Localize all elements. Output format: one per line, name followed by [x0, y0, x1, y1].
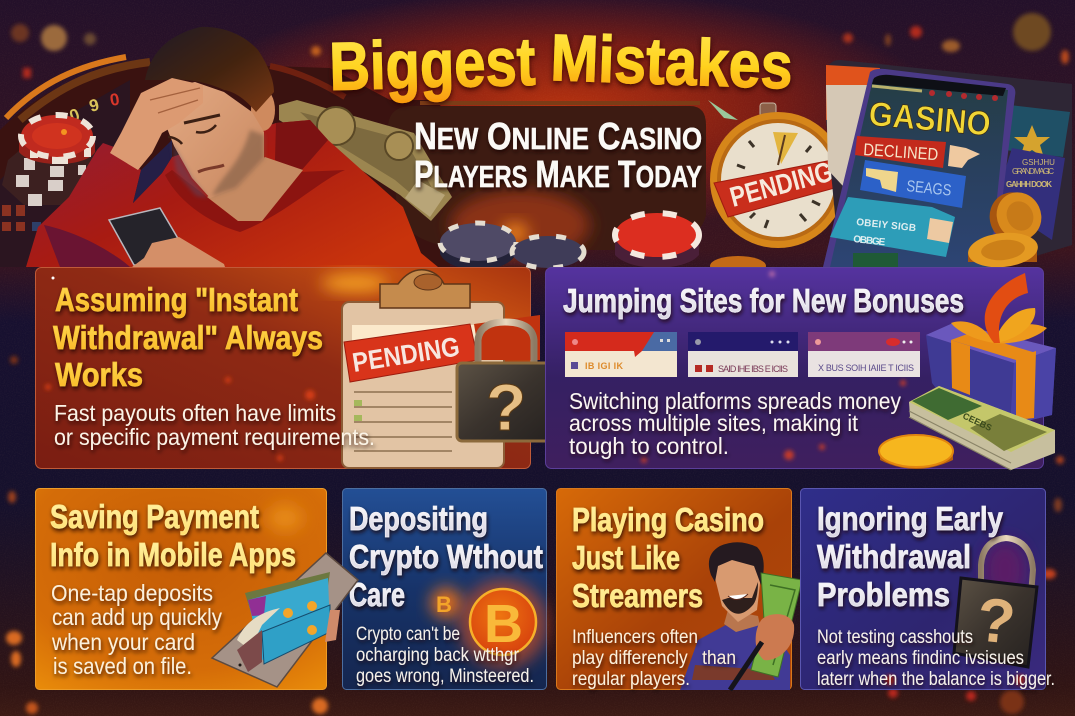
icon: padlock with question mark — [954, 538, 1037, 667]
subtitle — [414, 116, 702, 196]
pending tag: PENDING — [350, 331, 462, 378]
body text — [51, 580, 222, 679]
heading: Saving Payment — [50, 498, 259, 535]
blue button — [860, 160, 966, 208]
panel: depositing crypto — [342, 488, 547, 690]
title — [328, 20, 794, 105]
heading: Info in Mobile Apps — [50, 536, 296, 573]
purple card: GSHJHU — [1022, 158, 1055, 167]
body text — [356, 624, 534, 687]
body text — [569, 388, 901, 459]
teal card: OBEIY SIGB — [856, 217, 917, 234]
panel: jumping sites — [546, 268, 1056, 470]
body text: or specific payment requirements. — [54, 424, 375, 450]
purple card: GRAND MAGIC — [1012, 167, 1054, 176]
browser thumbnails — [565, 332, 920, 377]
icon: gift box — [926, 273, 1056, 425]
heading: Problems — [817, 576, 950, 613]
browser thumbnails: IB IGI IK — [585, 361, 624, 371]
heading — [817, 500, 1004, 613]
body text: Influencers often — [572, 627, 698, 648]
title: Mistakes — [550, 20, 794, 102]
heading: Depositing — [349, 500, 488, 537]
person with phone — [26, 27, 438, 267]
icon: cash stack: CEEBS — [961, 411, 993, 433]
body text: tough to control. — [569, 433, 729, 459]
poker chip stack, left — [2, 115, 96, 206]
body text: Not testing casshouts — [817, 627, 973, 648]
body text: is saved on file. — [53, 653, 192, 679]
heading — [53, 281, 323, 393]
heading: Playing Casino — [572, 501, 764, 538]
coins — [966, 184, 1049, 271]
heading — [572, 501, 764, 614]
icon: cash stack — [909, 386, 1055, 470]
heading: Ignoring Early — [817, 500, 1004, 537]
subtitle: NEW ONLINE CASINO — [414, 116, 702, 158]
tablet casino app — [823, 60, 1072, 271]
tablet frame — [823, 69, 1015, 267]
heading: Streamers — [572, 577, 703, 614]
roulette table: 0 — [108, 90, 121, 110]
declined button: DECLINED — [863, 140, 939, 164]
body text: Crypto can't be — [356, 624, 460, 645]
icon: padlock: ? — [486, 370, 526, 444]
stopwatch with pending band — [708, 100, 853, 248]
body text: Fast payouts often have limits — [54, 400, 336, 426]
heading: Just Like — [572, 539, 680, 576]
hand on phone — [132, 237, 225, 267]
icon: gold coin — [879, 435, 953, 469]
browser thumbnails: SAID IHE IBS E ICIIS — [718, 364, 788, 374]
pending band: PENDING — [727, 156, 836, 213]
blue button: SEAGS — [906, 178, 952, 200]
panel: saving payment info — [36, 488, 358, 690]
roulette table: 9 — [87, 95, 101, 116]
icon: bitcoin coin: B — [484, 594, 523, 654]
heading — [349, 500, 543, 613]
heading: Assuming "Instant — [55, 281, 298, 318]
roulette table — [0, 57, 450, 267]
heading: Withdrawal" Always — [53, 319, 323, 356]
dark gap under arm — [133, 140, 172, 203]
panel: playing casino like streamers — [556, 488, 802, 690]
hair — [145, 27, 274, 112]
heading: Jumping Sites for New Bonuses — [563, 282, 964, 319]
heading: Withdrawal — [817, 538, 971, 575]
panel: ignoring withdrawal problems — [800, 488, 1055, 690]
browser thumbnails: X BUS SOIH IAIIE T ICIIS — [818, 363, 914, 373]
body text: across multiple sites, making it — [569, 410, 859, 436]
icon: bitcoin coin: B — [436, 592, 452, 617]
neck — [207, 157, 303, 221]
heading: Works — [55, 356, 143, 393]
body text: regular players. — [572, 669, 690, 690]
body text — [54, 400, 375, 450]
body text: play differencly than — [572, 648, 736, 669]
hand on forehead — [110, 78, 203, 170]
gasino logo: GASINO — [867, 95, 992, 144]
heading: Crypto Wthout — [349, 538, 543, 575]
icon: bitcoin coin — [431, 580, 547, 668]
body text: Switching platforms spreads money — [569, 388, 901, 414]
body text: goes wrong, Minsteered. — [356, 666, 534, 687]
declined button — [855, 136, 946, 168]
heading — [50, 498, 296, 573]
subtitle: PLAYERS MAKE TODAY — [414, 154, 702, 196]
body text: can add up quickly — [52, 604, 222, 630]
teal card: OBBGE — [853, 234, 886, 248]
icon: streamer with cash — [680, 542, 802, 690]
purple card: GAHHH DOOK — [1006, 180, 1052, 189]
roulette table: 0 — [67, 105, 82, 126]
center chips — [440, 213, 766, 276]
star card — [1005, 105, 1070, 158]
face — [163, 82, 264, 198]
purple card — [995, 148, 1065, 240]
icon: clipboard — [342, 270, 540, 468]
money bills — [279, 100, 452, 221]
body text: ocharging back wtthgr — [356, 645, 520, 666]
hoodie — [26, 120, 438, 267]
heading: Care — [349, 576, 405, 613]
body text: One-tap deposits — [51, 580, 213, 606]
body text: early means findinc ivsisues — [817, 648, 1024, 669]
body text — [817, 627, 1055, 690]
ear — [251, 89, 275, 131]
subtitle backdrop — [388, 103, 706, 260]
icon: padlock with question mark: ? — [974, 585, 1018, 658]
body text — [572, 627, 736, 690]
icon: padlock — [457, 322, 552, 444]
phone — [109, 208, 183, 265]
teal card — [830, 197, 955, 257]
title: Biggest — [328, 24, 536, 105]
body text: when your card — [51, 629, 195, 655]
icon: phone with wallet cards — [212, 553, 358, 687]
panel: assuming instant withdrawal — [36, 268, 552, 468]
